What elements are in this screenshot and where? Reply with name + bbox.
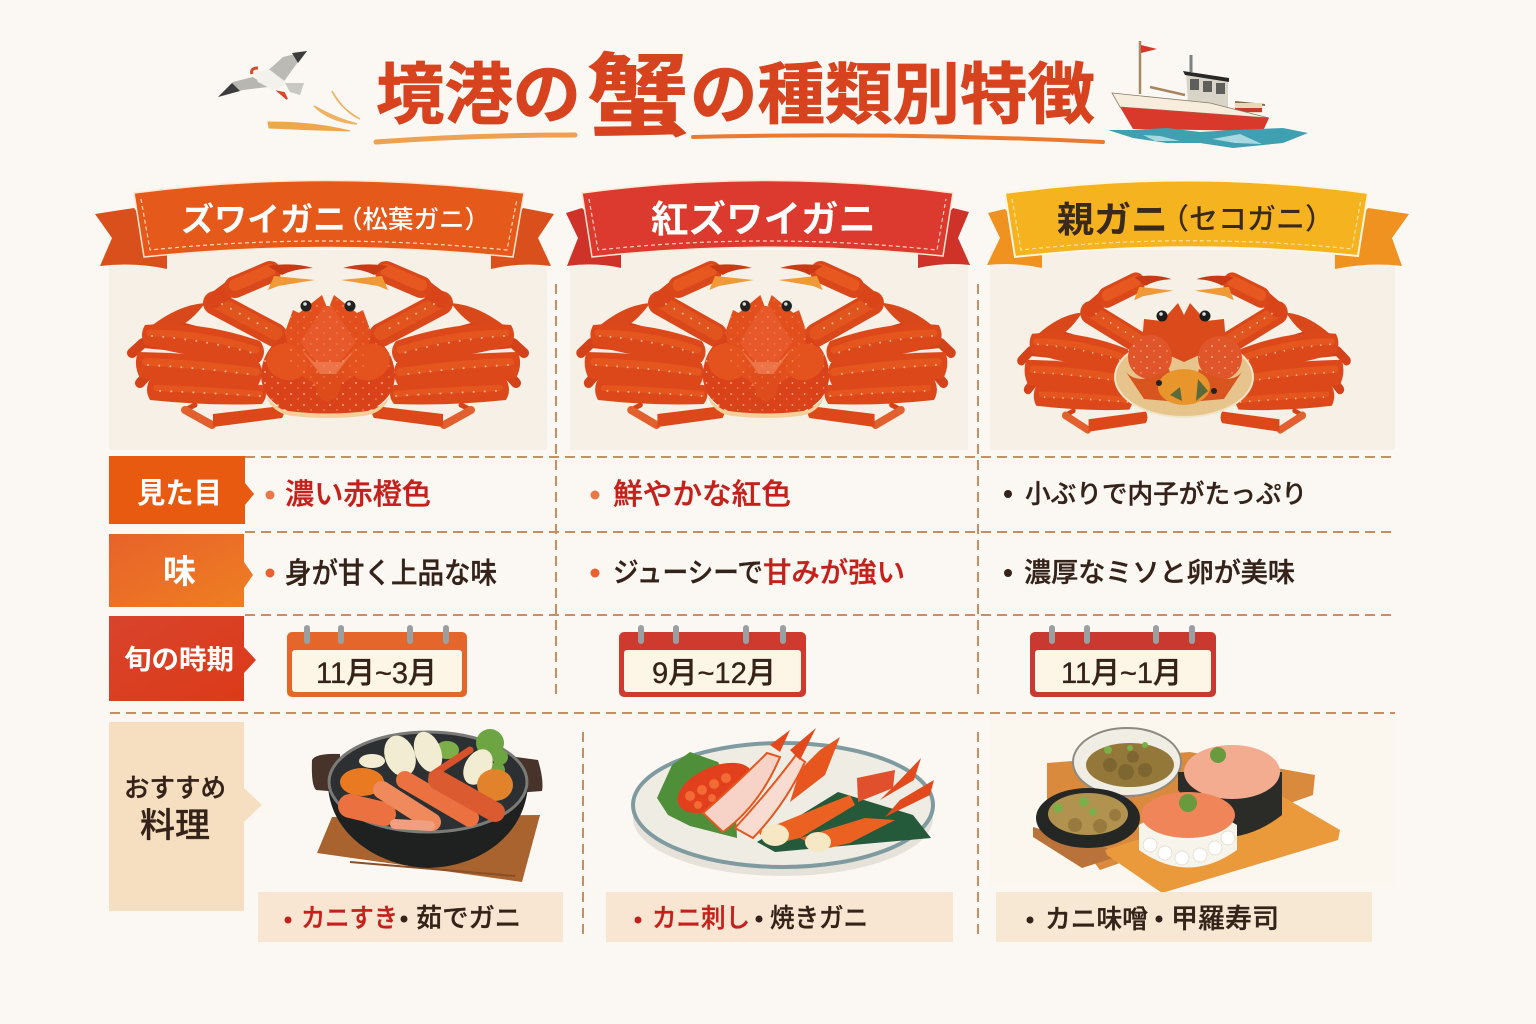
title: 境港の: [376, 58, 581, 133]
illustration: 紅ズワイガニ crab: [581, 264, 951, 427]
banner: 親ガニ: [987, 180, 1409, 269]
dish label: カニ味噌・甲羅寿司: [996, 892, 1372, 942]
banner: 親ガニ: 親ガニ: [1057, 199, 1168, 240]
calendar: 9月~12月: [619, 625, 806, 697]
illustration: ズワイガニ crab: [132, 264, 524, 427]
calendar: 11月~1月: 11月~1月: [1061, 657, 1182, 690]
table dividers: [110, 284, 1395, 935]
row label: おすすめ料理: [109, 722, 262, 911]
dish label: カニ味噌・甲羅寿司: 甲羅寿司: [1171, 904, 1279, 934]
dish label: カニ刺し・焼きガニ: [606, 892, 953, 942]
calendar: 11月~1月: [1030, 625, 1216, 697]
taste: 紅ズワイガニ: [590, 557, 905, 588]
taste: 紅ズワイガニ: 甘みが強い: [763, 557, 905, 588]
title: [376, 48, 1095, 148]
banner: ズワイガニ: [95, 180, 554, 269]
calendar: 11月~3月: 11月~3月: [316, 657, 437, 690]
calendar: 9月~12月: 9月~12月: [652, 657, 776, 690]
banner: 紅ズワイガニ: 紅ズワイガニ: [651, 199, 876, 240]
banner: 紅ズワイガニ: [566, 180, 970, 268]
row label: おすすめ料理: 料理: [140, 807, 210, 845]
title: 蟹: [587, 48, 689, 148]
title: の種類別特徴: [690, 58, 1095, 133]
illustration: hot pot on board: [312, 728, 542, 882]
dish label: カニすき・茹でガニ: 茹でガニ: [416, 903, 521, 933]
banner: ズワイガニ: ズワイガニ: [181, 201, 346, 238]
taste: ズワイガニ: 身が甘く上品な味: [285, 557, 497, 590]
taste: 親ガニ: 濃厚なミソと卵が美味: [1024, 558, 1295, 588]
row label: 旬の時期: 旬の時期: [124, 645, 234, 675]
illustration: crab miso and sushi board: [1033, 728, 1340, 893]
decorative sparks by the title: [268, 91, 360, 131]
illustration: 親ガニ crab: [1021, 276, 1347, 432]
row label: 見た目: 見た目: [137, 478, 222, 510]
calendar: 11月~3月: [287, 625, 467, 697]
icon: fishing boat: [1108, 41, 1308, 148]
icon: seagull: [218, 51, 307, 99]
banner: ズワイガニ: （松葉ガニ）: [337, 206, 490, 234]
row label: おすすめ料理: おすすめ: [124, 773, 226, 803]
dish panel background: [990, 716, 1395, 886]
banner: 親ガニ: （セコガニ）: [1160, 203, 1334, 236]
appearance: 紅ズワイガニ: 鮮やかな紅色: [613, 478, 791, 511]
row label: 味: 味: [163, 553, 196, 590]
row label: 旬の時期: [109, 616, 256, 701]
row label: 味: [109, 534, 253, 607]
dish label: カニすき・茹でガニ: [258, 892, 563, 942]
dish label: カニ味噌・甲羅寿司: カニ味噌: [1045, 904, 1148, 934]
row label: 見た目: [109, 456, 254, 524]
dish label: カニすき・茹でガニ: カニすき: [301, 903, 398, 933]
appearance: ズワイガニ: 濃い赤橙色: [285, 478, 431, 511]
panel backgrounds behind crabs: [109, 250, 1395, 450]
appearance: 親ガニ: 小ぶりで内子がたっぷり: [1025, 479, 1307, 509]
dish label: カニ刺し・焼きガニ: 焼きガニ: [770, 903, 868, 933]
title underline: [376, 135, 1103, 142]
dish label: カニ刺し・焼きガニ: カニ刺し: [652, 903, 750, 933]
illustration: crab sashimi plate: [633, 728, 934, 876]
taste: 紅ズワイガニ: ジューシーで: [613, 557, 763, 588]
